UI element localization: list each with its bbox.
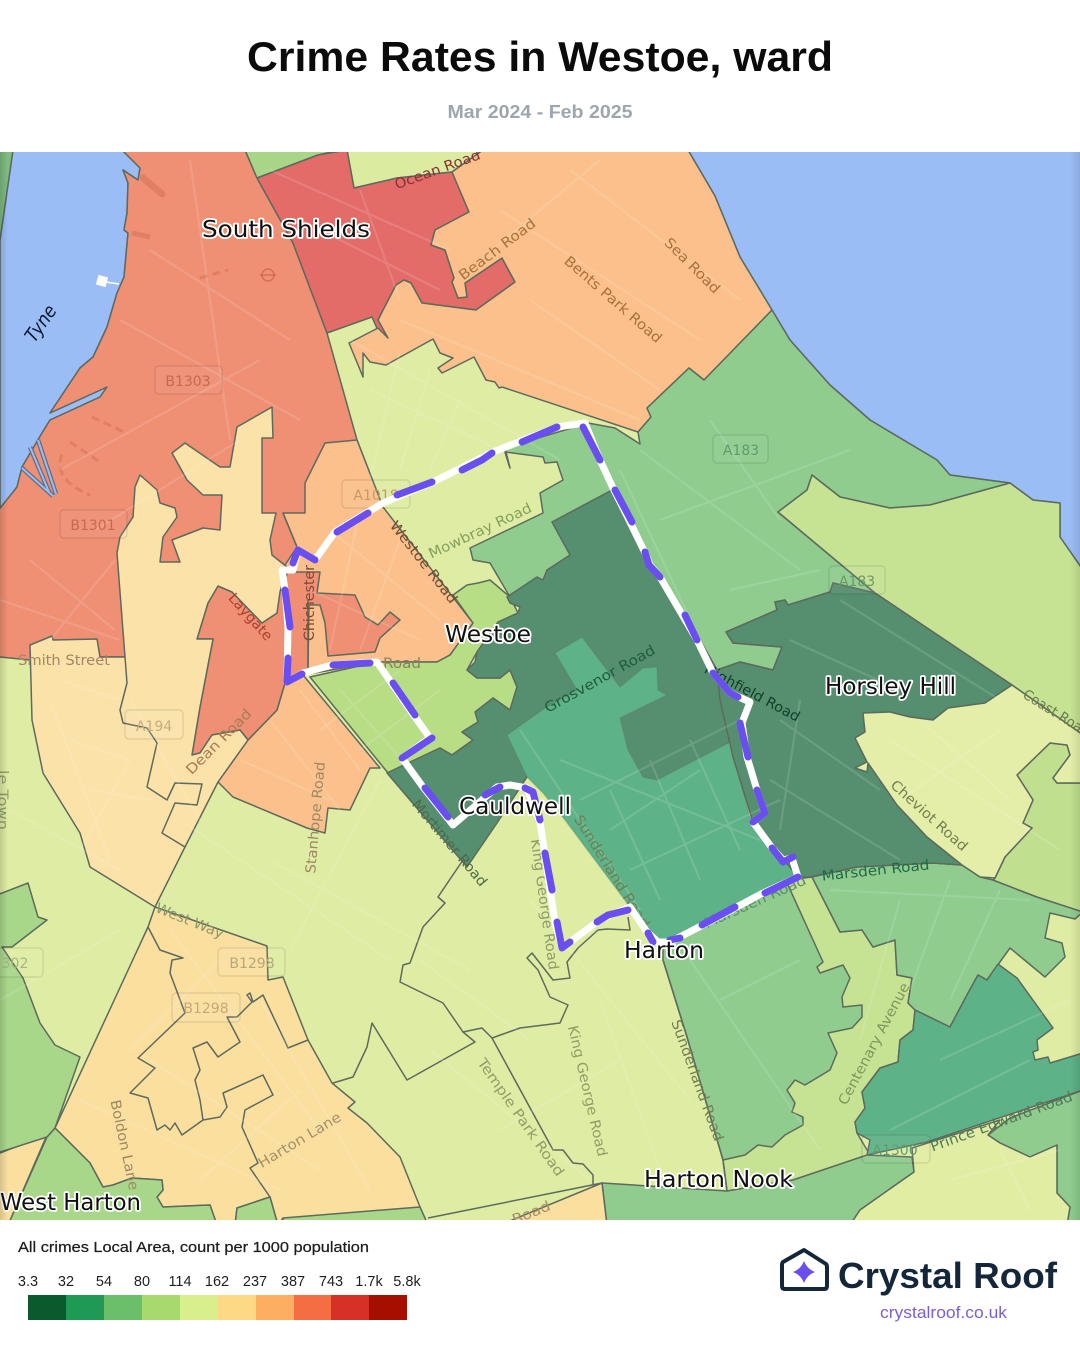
road labels: King George Road [564,1024,610,1158]
legend value labels: 387 [281,1274,305,1290]
place labels: Westoe [445,622,531,648]
water feature: Tyne jetty marker [96,275,119,287]
road shields: A1018 [353,488,399,504]
zone: Westoe central orange [218,440,473,833]
zone: Cauldwell mid green [507,637,798,943]
road labels: Road [510,1198,553,1228]
place labels: Cauldwell [459,794,571,820]
road labels: Bents Park Road [561,253,665,347]
road shields: A194 [136,719,172,735]
legend value labels: 743 [319,1274,343,1290]
zone: small green pieces at bottom edge [234,1196,426,1220]
zone: South Shields west, high crime [0,152,384,661]
zone: lime north-east of centre [348,152,479,187]
road labels: Sea Road [661,235,723,297]
road labels: Stanhope Road [303,761,329,874]
road labels: Marsden Road [821,857,930,885]
zone: Horsley Hill dark green [717,583,1012,877]
place labels: Harton Nook [644,1167,794,1193]
road shields: A183 [723,443,759,459]
zone: southern orange wedge [510,1182,608,1220]
legend value labels: 3.3 [18,1274,38,1290]
road labels: West Way [153,900,226,942]
place labels: South Shields [202,217,370,243]
legend value labels: 80 [134,1274,150,1290]
zone: Westoe light green [310,580,518,773]
zone: Laygate high crime [192,572,400,755]
legend value labels: 1.7k [355,1274,383,1290]
zone: Westoe dark green, low crime [387,490,730,867]
legend value labels: 5.8k [393,1274,421,1290]
place labels: West Harton [0,1190,141,1216]
road shields: B1301 [70,518,116,534]
zone: A1300 lower green [602,1155,914,1225]
road labels: Dean Road [183,706,255,778]
legend value labels: 237 [243,1274,267,1290]
road labels: Mortimer Road [408,797,490,890]
legend value labels: 114 [168,1274,192,1290]
road shields: B1298 [183,1001,229,1017]
zone: lower-south lime [850,1120,1070,1225]
logo: Crystal Roof [782,1250,1058,1322]
legend value labels: 54 [96,1274,112,1290]
zone: west green [0,883,80,1153]
place labels: Horsley Hill [825,674,956,700]
road labels: Prince Edward Road [928,1089,1075,1155]
legend title: All crimes Local Area, count per 1000 population [18,1240,369,1256]
legend value labels: 32 [58,1274,74,1290]
road labels: Mowbray Road [426,500,534,562]
road labels: Harton Lane [256,1110,344,1172]
water: dock piers [22,440,56,496]
street texture [0,160,1070,1210]
road labels: Sunderland Road [667,1018,726,1144]
zone: Harton green [663,885,862,1160]
zone: Smith Street pale yellow [30,407,287,907]
road shields [0,366,930,1163]
water: North Sea [688,150,1080,570]
road labels: Cheviot Road [887,777,970,855]
legend value labels [18,1274,421,1290]
road labels: Road [383,656,421,672]
zone: top-left green bank [0,150,13,240]
road shields: A183 [839,574,875,590]
road labels: Tyne [21,301,62,346]
zone: West Harton green [8,1128,217,1225]
icon: underground roundel [260,269,276,281]
icon: house with star [782,1250,827,1289]
road labels: Sunderland Road [570,813,653,931]
map edge vignette [0,152,1080,1220]
zone: east lime [993,743,1080,912]
road shields: B1298 [229,956,275,972]
logo wordmark: Crystal Roof [838,1255,1058,1296]
ward boundary: Westoe [282,423,798,948]
road labels: Ocean Road [393,147,483,193]
zone: Harton Lane yellow [55,907,428,1225]
road labels: King George Road [527,838,561,971]
legend [18,1240,421,1320]
road shields: 302 [2,956,28,972]
ward outline: purple dashes [285,427,798,948]
zone: A183 coast green [470,310,1010,670]
road labels: Highfield Road [701,662,802,725]
road labels: Laygate [225,590,275,644]
zone: bottom-left yellow [0,1138,46,1220]
zone: lime strip by Centenary Avenue [723,877,915,1191]
road labels: Centenary Avenue [835,980,913,1108]
zone: coast lime [778,475,1080,735]
road shields: A1300 [872,1143,918,1159]
ward outline: white base [282,423,798,948]
zone: Marsden green [812,863,1080,1027]
zone: Prince Edward mid green [855,964,1080,1155]
title: Crime Rates in Westoe, ward [247,33,833,80]
zone: inner boundaries [130,452,727,1218]
place labels [0,217,956,1216]
dock features [60,178,228,495]
legend value labels: 162 [205,1274,229,1290]
road shields: B1303 [165,374,211,390]
website url: crystalroof.co.uk [880,1304,1008,1322]
road labels: Boldon Lane [107,1099,141,1192]
road labels: Grosvenor Road [542,642,658,717]
zone: Bents Park, orange [349,150,772,432]
zone: south-east green [988,1090,1080,1225]
road labels: Westoe Road [386,518,460,607]
road labels: Marsden Road [702,873,809,932]
subtitle: date range: Mar 2024 - Feb 2025 [448,101,632,122]
water: river Tyne [0,150,140,510]
map base: lime area [0,318,1080,1220]
road labels: Chichester [302,565,318,641]
zone: Cheviot pale lime [855,685,1080,878]
place labels: Harton [624,938,704,964]
zone: top green [245,152,331,178]
legend colour scale [28,1295,407,1320]
road labels: Temple Park Road [473,1055,567,1180]
zone: Ocean Road, very high crime [257,150,515,342]
zone: inner A194 boundary [120,657,202,847]
road labels: Smith Street [18,653,111,669]
road labels: Beach Road [456,216,539,284]
